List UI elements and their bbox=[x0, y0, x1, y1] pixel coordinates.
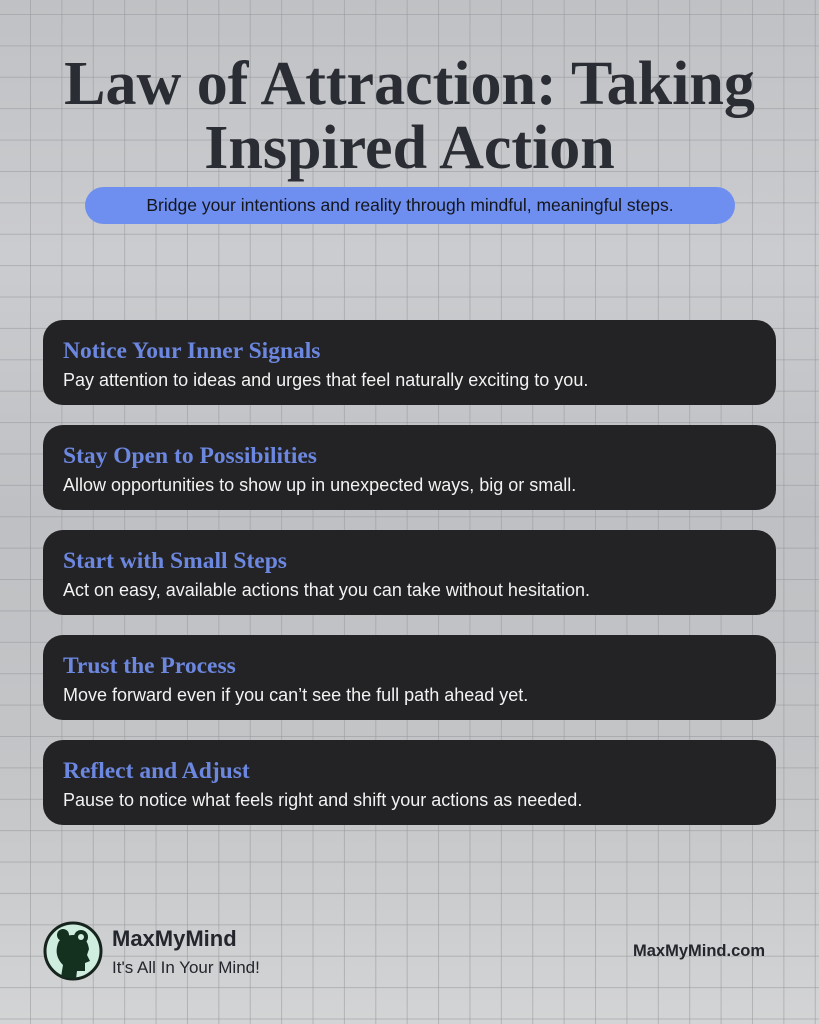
subtitle pill: Bridge your intentions and reality through mindful, meaningful steps. bbox=[146, 195, 674, 215]
website: MaxMyMind.com bbox=[633, 942, 765, 960]
title bbox=[64, 50, 755, 182]
title: Inspired Action bbox=[204, 114, 615, 182]
card: reflect: Pause to notice what feels right and shift your actions as needed. bbox=[63, 790, 582, 810]
card: stay open: Stay Open to Possibilities bbox=[63, 443, 317, 469]
logo icon bbox=[44, 922, 102, 980]
card: notice signals: Pay attention to ideas and urges that feel naturally exciting to you. bbox=[63, 370, 588, 390]
subtitle pill bbox=[85, 187, 735, 224]
card: reflect: Reflect and Adjust bbox=[63, 758, 250, 784]
brand name: MaxMyMind bbox=[112, 926, 237, 951]
card: stay open bbox=[43, 425, 776, 510]
card: small steps: Act on easy, available actions that you can take without hesitation. bbox=[63, 580, 590, 600]
card: reflect bbox=[43, 740, 776, 825]
title: Law of Attraction: Taking bbox=[64, 50, 755, 118]
card: notice signals: Notice Your Inner Signals bbox=[63, 338, 320, 364]
tagline: It's All In Your Mind! bbox=[112, 958, 260, 977]
card: trust bbox=[43, 635, 776, 720]
card: stay open: Allow opportunities to show up in unexpected ways, big or small. bbox=[63, 475, 576, 495]
card: trust: Trust the Process bbox=[63, 653, 236, 679]
card: small steps bbox=[43, 530, 776, 615]
card: trust: Move forward even if you can’t see the full path ahead yet. bbox=[63, 685, 528, 705]
card: small steps: Start with Small Steps bbox=[63, 548, 287, 574]
card: notice signals bbox=[43, 320, 776, 405]
